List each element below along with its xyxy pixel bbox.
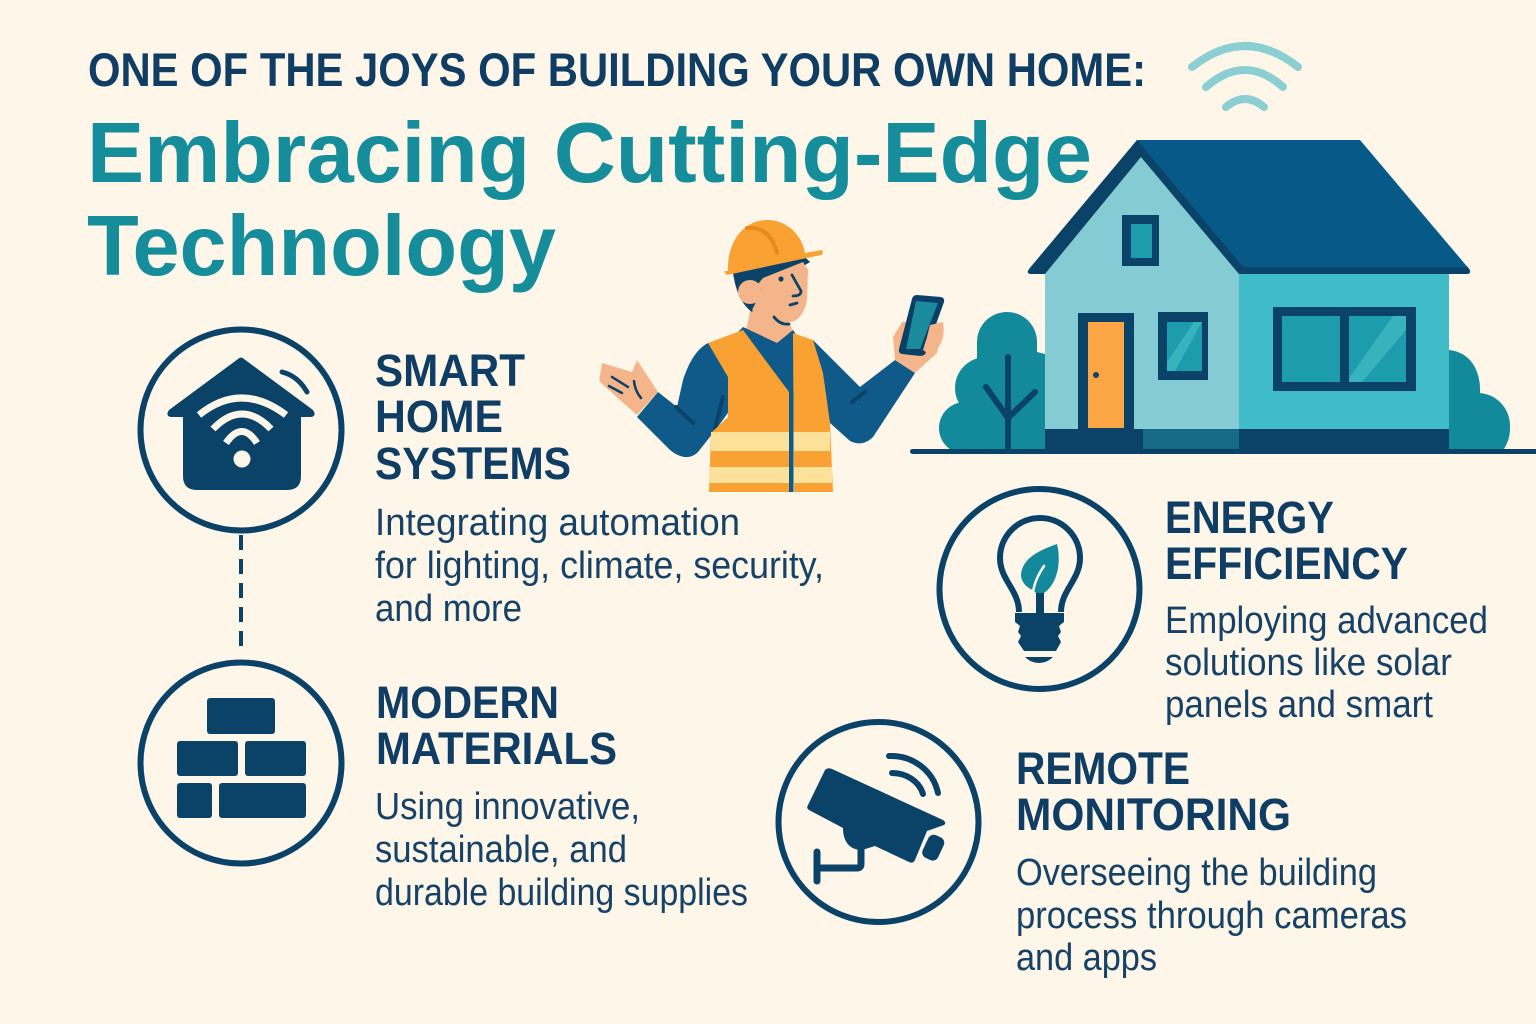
description: and apps: [1016, 937, 1157, 979]
heading: [375, 345, 571, 489]
description: [1016, 852, 1407, 979]
heading: MONITORING: [1016, 789, 1291, 840]
description: process through cameras: [1016, 895, 1407, 937]
title line: main 1: Embracing Cutting-Edge: [87, 106, 1092, 201]
description: durable building supplies: [375, 872, 748, 914]
illustration: construction worker: [599, 220, 944, 492]
icon: light bulb with leaf: [940, 489, 1140, 689]
heading: EFFICIENCY: [1165, 538, 1408, 589]
description: [1165, 600, 1488, 726]
left tree: [939, 312, 1045, 454]
heading: REMOTE: [1016, 743, 1190, 794]
heading: MATERIALS: [376, 723, 617, 774]
hard hat: [725, 220, 823, 275]
description: Overseeing the building: [1016, 852, 1377, 894]
door: [1078, 313, 1134, 429]
dashed connector: [239, 535, 243, 650]
heading: ENERGY: [1165, 492, 1334, 543]
description: panels and smart: [1165, 684, 1433, 726]
walls: [1045, 157, 1449, 449]
title: [87, 43, 1146, 294]
heading: HOME: [375, 391, 503, 442]
description: Using innovative,: [375, 786, 640, 828]
icon: bricks: [140, 662, 342, 864]
safety vest: [708, 330, 833, 492]
inner shirt: [735, 327, 800, 400]
heading: SMART: [375, 345, 525, 396]
description: Integrating automation: [375, 502, 740, 544]
panel: smart home systems: [140, 330, 824, 630]
right arm: [813, 340, 915, 443]
large window: [1273, 307, 1416, 391]
description: sustainable, and: [375, 829, 627, 871]
ground line: [910, 449, 1536, 454]
panel: remote monitoring: [778, 722, 1407, 979]
description: [375, 502, 824, 630]
description: [375, 786, 748, 914]
title line: kicker: ONE OF THE JOYS OF BUILDING YOUR OWN HOME:: [88, 43, 1146, 96]
heading: [1016, 743, 1291, 840]
right bush: [1449, 350, 1510, 449]
panel: energy efficiency: [940, 489, 1488, 726]
small window: [1158, 312, 1208, 380]
roof: [1028, 140, 1470, 274]
description: for lighting, climate, security,: [375, 545, 824, 587]
illustration: house: [910, 140, 1536, 454]
heading: SYSTEMS: [375, 438, 571, 489]
icon: wifi signal above house: [1192, 46, 1298, 107]
description: and more: [375, 588, 522, 630]
title line: main 2: Technology: [87, 199, 556, 294]
icon: security camera: [778, 722, 978, 922]
attic window: [1122, 215, 1159, 266]
heading: [1165, 492, 1408, 589]
description: Employing advanced: [1165, 600, 1488, 642]
icon: smart home: [140, 330, 342, 530]
neck and head: [733, 255, 810, 344]
left arm: [637, 343, 730, 457]
heading: MODERN: [376, 677, 559, 728]
sleeve creases: [676, 392, 865, 428]
left hand: [599, 360, 658, 415]
phone in hand: [893, 295, 944, 373]
heading: [376, 677, 617, 774]
description: solutions like solar: [1165, 642, 1452, 684]
panel: modern materials: [140, 662, 748, 914]
